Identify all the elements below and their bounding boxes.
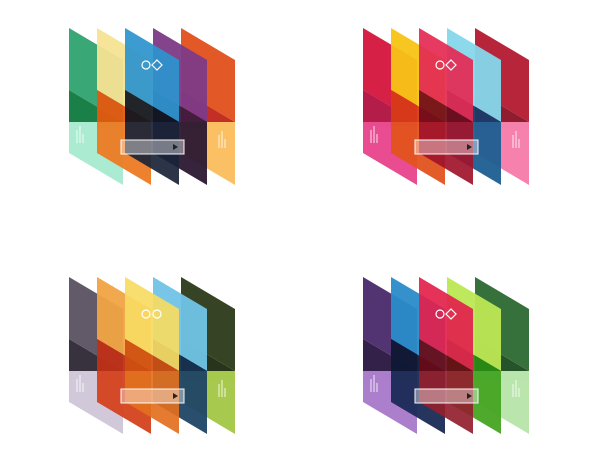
panel: bottom-left design (grey, orange, yellow, blue, olive) [69, 277, 235, 434]
panel: bottom-right design (purple, blue, red, lime, green) [363, 277, 529, 434]
icons and buttons overlay TR [371, 60, 519, 154]
panel: top-left design (green yellow blue purple orange) [69, 28, 235, 185]
panel: top-right design (reds, yellow, light blue) [363, 28, 529, 185]
icons and buttons overlay BR [371, 309, 519, 403]
icons and buttons overlay TL [77, 60, 225, 154]
icons and buttons overlay BL [77, 310, 225, 403]
